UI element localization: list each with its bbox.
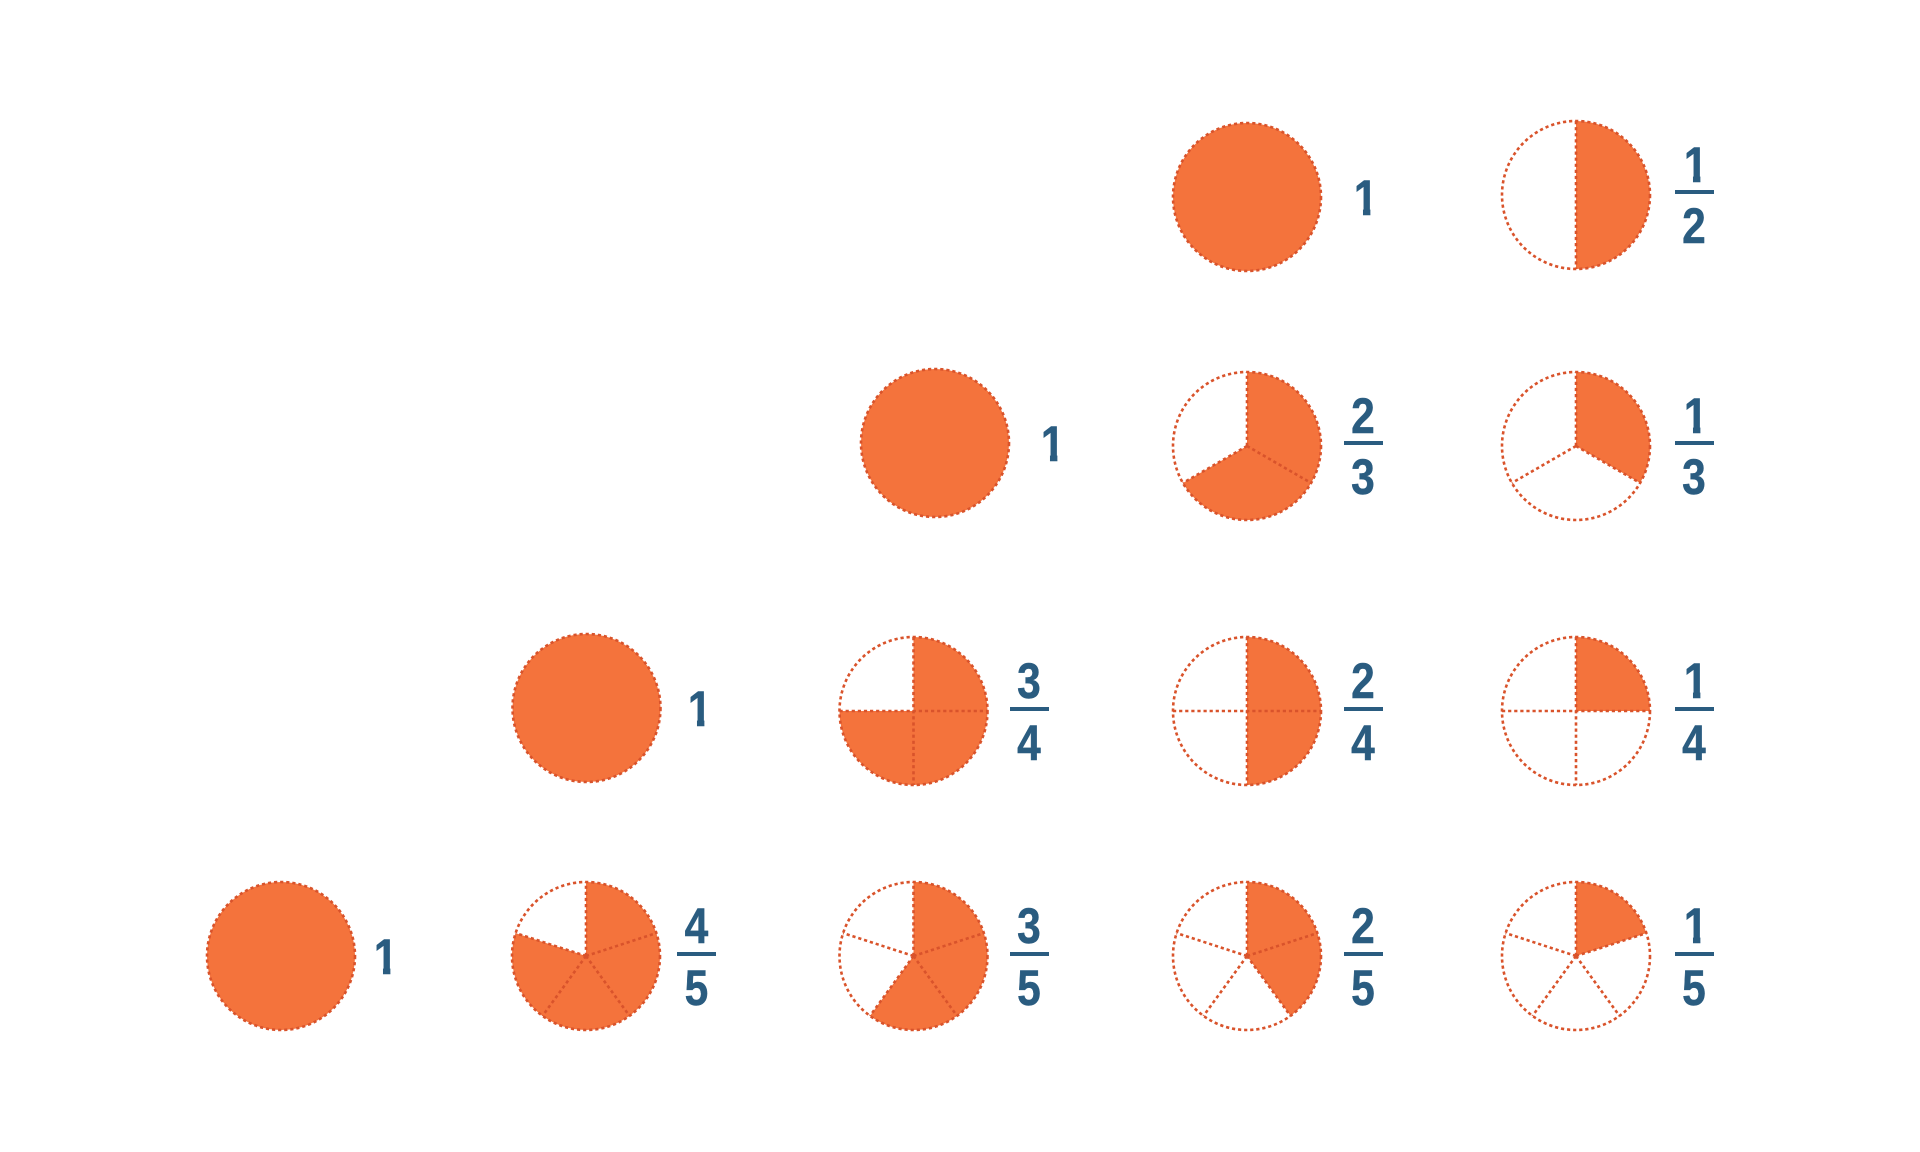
fraction: three fifths: 3 <box>1017 898 1041 954</box>
fraction: one quarter: 4 <box>1682 715 1706 771</box>
fraction: two quarters <box>1173 637 1383 785</box>
fraction: three quarters: 3 <box>1017 653 1041 709</box>
fraction: one fifth: 5 <box>1682 960 1706 1016</box>
fraction: three fifths <box>840 882 1049 1030</box>
fraction: two thirds: 2 <box>1351 388 1375 444</box>
whole circle with label 1: 1 <box>1041 416 1065 472</box>
fraction: one fifth <box>1502 882 1714 1030</box>
fraction: one fifth: 1 <box>1684 898 1708 954</box>
fraction: two fifths: 5 <box>1351 960 1375 1016</box>
fraction: two fifths: 2 <box>1351 898 1375 954</box>
row 3: quarters <box>512 634 1714 785</box>
fraction: one half: 2 <box>1682 198 1706 254</box>
fraction: one third <box>1502 372 1714 520</box>
fraction: one third: 1 <box>1684 388 1708 444</box>
whole circle with label 1: 1 <box>374 929 398 985</box>
row 1: halves <box>1173 121 1714 271</box>
fraction: one third: 3 <box>1682 449 1706 505</box>
fraction: three quarters: 4 <box>1017 715 1041 771</box>
whole circle with label 1: 1 <box>1354 170 1378 226</box>
fraction: two thirds <box>1173 372 1383 520</box>
fraction: one half: 1 <box>1684 137 1708 193</box>
fraction: one quarter <box>1502 637 1714 785</box>
fraction: four fifths: 4 <box>685 898 708 954</box>
fraction: three quarters <box>840 637 1049 785</box>
whole circle with label 1 <box>207 882 398 1030</box>
row 4: fifths <box>207 882 1714 1030</box>
whole circle with label 1 <box>861 369 1065 517</box>
fraction: two fifths <box>1173 882 1383 1030</box>
fraction: two thirds: 3 <box>1351 449 1375 505</box>
whole circle with label 1: 1 <box>688 681 712 737</box>
whole circle with label 1 <box>1173 123 1378 271</box>
fraction: one quarter: 1 <box>1684 653 1708 709</box>
fraction: two quarters: 4 <box>1351 715 1375 771</box>
whole circle with label 1 <box>512 634 712 782</box>
row 2: thirds <box>861 369 1714 520</box>
fraction: four fifths <box>512 882 716 1030</box>
fraction: two quarters: 2 <box>1351 653 1375 709</box>
fraction: three fifths: 5 <box>1017 960 1041 1016</box>
fraction: one half <box>1502 121 1714 269</box>
fraction: four fifths: 5 <box>685 960 708 1016</box>
